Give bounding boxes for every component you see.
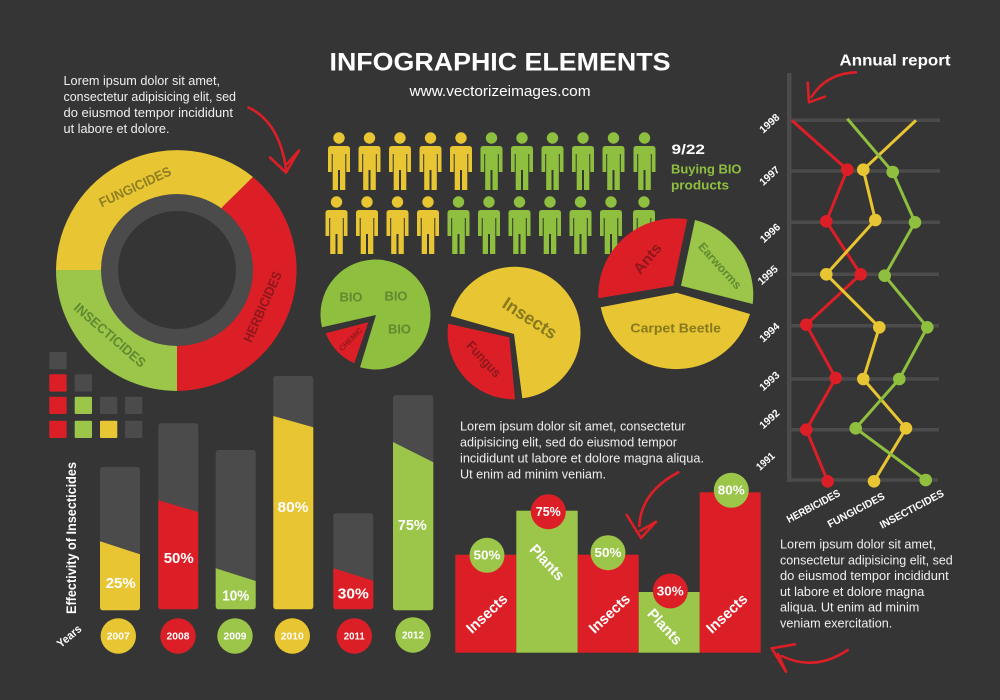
bar 2011: 2011	[344, 632, 365, 642]
bar 2007: 2007	[107, 632, 130, 642]
bar 2007: 25%	[106, 575, 136, 592]
bar 2012: 2012	[402, 630, 424, 642]
year labels: 1991	[754, 450, 778, 473]
series: insecticides	[847, 119, 934, 486]
series labels: HERBICIDES	[785, 487, 842, 526]
year labels: 1998	[757, 112, 782, 136]
chart grid and axis	[789, 73, 940, 482]
bar: insects 80%: Insects	[703, 591, 751, 637]
bar 2011: 30%	[338, 586, 369, 603]
pie chart: bio vs chemic: BIO	[384, 289, 408, 304]
pie chart: ants, earworms, carpet beetle	[598, 218, 753, 369]
bar chart: insects and plants	[455, 473, 761, 653]
bar 2008: 2008	[166, 632, 190, 642]
year labels	[754, 112, 783, 473]
series: fungicides	[820, 120, 916, 488]
text block: top left: ut labore et dolore.	[64, 121, 170, 136]
text block: centre: adipisicing elit, sed do eiusmod tempor	[460, 435, 678, 450]
bar: insects 80%	[700, 473, 761, 653]
bar 2010	[273, 376, 313, 654]
bar chart: effectivity of insecticides	[55, 376, 433, 654]
donut inner ring	[101, 194, 253, 346]
pie chart: ants, earworms, carpet beetle: Earworms	[695, 240, 745, 292]
pie chart: bio vs chemic: CHEMIC	[337, 326, 365, 353]
pie chart: bio vs chemic: BIO	[388, 322, 411, 337]
donut chart	[56, 150, 297, 391]
bar: insects 50%: 50%	[474, 549, 500, 563]
legend squares	[49, 352, 142, 438]
year labels: 1995	[756, 263, 781, 288]
title: INFOGRAPHIC ELEMENTS	[330, 48, 670, 76]
text block: top left	[64, 73, 236, 136]
text block: centre: Lorem ipsum dolor sit amet, consectetur	[460, 419, 686, 434]
stat: 9/22 buying bio: 9/22	[672, 142, 705, 157]
label: insecticides: INSECTICIDES	[71, 300, 149, 370]
stat: 9/22 buying bio: Buying BIO	[671, 162, 742, 176]
stat: 9/22 buying bio: products	[671, 178, 729, 192]
series labels: INSECTICIDES	[878, 488, 946, 532]
donut hole	[118, 211, 236, 329]
text block: bottom right: do eiusmod tempor incididunt	[780, 568, 949, 583]
text block: centre: incididunt ut labore et dolore magna aliqua.	[460, 450, 704, 465]
pie chart: ants, earworms, carpet beetle: Carpet Beetle	[630, 320, 721, 335]
axis label: years: Years	[55, 623, 84, 650]
bar 2007	[100, 467, 140, 654]
label: fungicides: FUNGICIDES	[97, 164, 174, 210]
series: herbicides	[792, 120, 867, 488]
label: herbicides: HERBICIDES	[240, 269, 285, 345]
year labels: 1992	[757, 407, 782, 432]
text block: centre: Ut enim ad minim veniam.	[460, 466, 606, 481]
pictogram: people row 1	[328, 132, 656, 190]
stat: 9/22 buying bio	[671, 142, 742, 192]
pie chart: insects vs fungus	[448, 267, 581, 399]
bar 2008	[158, 423, 198, 654]
axis title: Effectivity of Insecticides	[63, 462, 79, 614]
year labels: 1996	[758, 221, 783, 246]
text block: top left: Lorem ipsum dolor sit amet,	[64, 73, 220, 88]
pictogram: people row 2	[326, 196, 655, 254]
arrow: centre text to bars	[627, 472, 678, 538]
text block: top left: do eiusmod tempor incididunt	[64, 105, 233, 120]
bar 2012: 75%	[398, 517, 427, 534]
segment: herbicides	[177, 177, 297, 391]
bar: insects 50%: 50%	[594, 546, 622, 560]
bar: plants 75%	[516, 494, 578, 653]
website url: www.vectorizeimages.com	[408, 84, 590, 100]
bar: plants 30%: 30%	[657, 584, 684, 598]
bar 2009	[216, 450, 256, 654]
segment: fungicides	[56, 150, 253, 270]
line chart: annual report	[754, 73, 946, 532]
year labels: 1997	[757, 164, 782, 188]
pie chart: insects vs fungus: Fungus	[463, 338, 504, 380]
bar 2010: 80%	[278, 499, 308, 516]
series labels	[785, 487, 946, 532]
arrow: annual report to chart	[808, 72, 856, 102]
bar 2010: 2010	[281, 632, 304, 642]
bar: plants 75%: 75%	[536, 505, 561, 519]
bar: plants 75%: Plants	[526, 541, 568, 584]
bar: plants 30%: Plants	[644, 606, 685, 649]
pie chart: bio vs chemic: BIO	[340, 290, 362, 305]
bar: insects 50%	[455, 538, 516, 653]
bar 2011	[333, 513, 373, 654]
bar 2009: 10%	[222, 588, 249, 604]
bar: insects 80%: 80%	[718, 484, 745, 498]
pie chart: insects vs fungus: Insects	[499, 293, 561, 343]
text block: centre	[460, 419, 704, 481]
arrow: top left to donut	[248, 108, 299, 172]
text block: top left: consectetur adipisicing elit, sed	[64, 89, 236, 104]
text block: bottom right: aliqua. Ut enim ad minim	[780, 600, 919, 615]
text block: bottom right: consectetur adipisicing elit, sed	[780, 552, 953, 567]
segment: insecticides	[56, 270, 177, 391]
pie chart: bio vs chemic	[320, 260, 430, 370]
bar: insects 50%: Insects	[463, 591, 511, 637]
bar 2008: 50%	[164, 550, 194, 567]
bar: insects 50%: Insects	[586, 591, 634, 637]
text block: bottom right: veniam exercitation.	[780, 616, 892, 631]
year labels: 1994	[757, 321, 782, 345]
text block: bottom right	[780, 536, 953, 631]
bar 2009: 2009	[224, 632, 247, 642]
text block: bottom right: ut labore et dolore magna	[780, 584, 925, 599]
heading: annual report: Annual report	[840, 52, 950, 70]
pie chart: ants, earworms, carpet beetle: Ants	[630, 240, 666, 278]
bar: plants 30%	[639, 574, 700, 653]
year labels: 1993	[757, 369, 782, 394]
arrow: bottom right text to bars	[772, 644, 848, 672]
text block: bottom right: Lorem ipsum dolor sit amet,	[780, 536, 936, 551]
series labels: FUNGICIDES	[826, 491, 887, 531]
bar 2012	[393, 395, 433, 653]
bar: insects 50%	[578, 535, 639, 653]
